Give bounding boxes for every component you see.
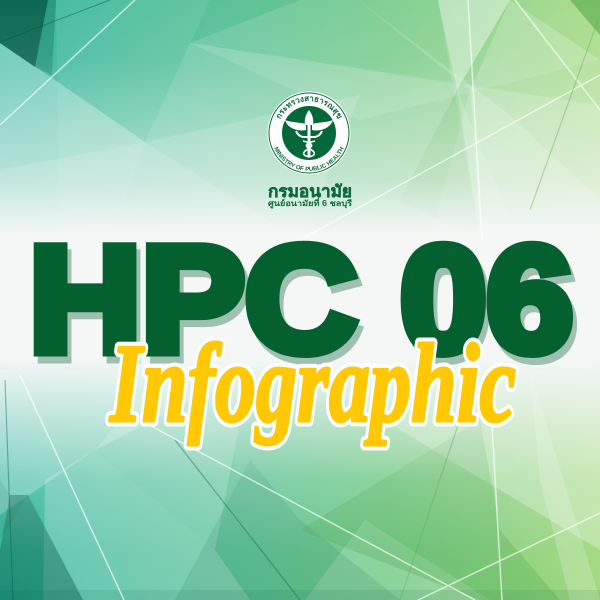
icon: caduceus xyxy=(285,110,333,157)
seal text: English: MINISTRY OF PUBLIC HEALTH xyxy=(274,146,344,171)
logo title: กรมอนามัย xyxy=(268,183,352,201)
heading: HPC 06 xyxy=(29,215,573,383)
heading shadow: HPC 06 xyxy=(33,222,577,390)
logo: Ministry of Public Health seal xyxy=(268,92,350,174)
seal text: Thai: กระทรวงสาธารณสุข xyxy=(276,96,342,119)
logo subtitle: ศูนย์อนามัยที่ 6 ชลบุรี xyxy=(268,197,353,209)
